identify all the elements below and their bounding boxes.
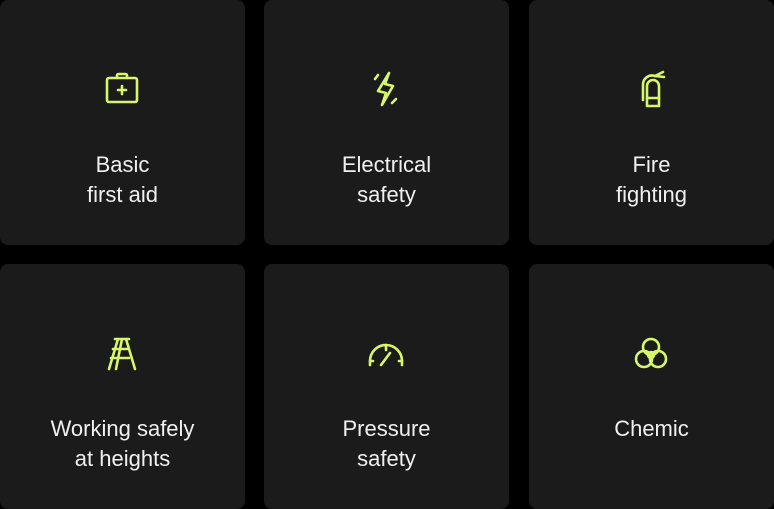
label: working safely at heights	[50, 416, 194, 471]
label: basic first aid: first aid	[87, 182, 158, 207]
label: working safely at heights: at heights	[75, 446, 170, 471]
label: basic first aid	[87, 152, 158, 207]
panel: basic first aid	[0, 0, 245, 245]
panel: chemic	[529, 264, 774, 509]
label: electrical safety: safety	[357, 182, 416, 207]
label: pressure safety	[342, 416, 431, 471]
label: fire fighting: Fire	[633, 152, 670, 177]
label: pressure safety: safety	[357, 446, 416, 471]
icon: first aid kit	[106, 72, 138, 104]
label: electrical safety: Electrical	[342, 152, 431, 177]
panel: fire fighting	[529, 0, 774, 245]
icon: biohazard	[634, 338, 668, 368]
label: fire fighting: fighting	[616, 182, 687, 207]
icon: lightning	[374, 72, 398, 106]
label: fire fighting	[616, 152, 687, 207]
label: working safely at heights: Working safely	[51, 416, 194, 441]
panel: pressure safety	[264, 264, 509, 509]
label: basic first aid: Basic	[96, 152, 149, 177]
icon: gauge	[368, 344, 404, 366]
icon: ladder	[108, 338, 136, 370]
icon: fire extinguisher	[642, 70, 666, 108]
label: pressure safety: Pressure	[342, 416, 431, 441]
panel: working at heights	[0, 264, 245, 509]
panel: electrical safety	[264, 0, 509, 245]
label: chemic: Chemic	[614, 416, 689, 441]
label: electrical safety	[342, 152, 431, 207]
